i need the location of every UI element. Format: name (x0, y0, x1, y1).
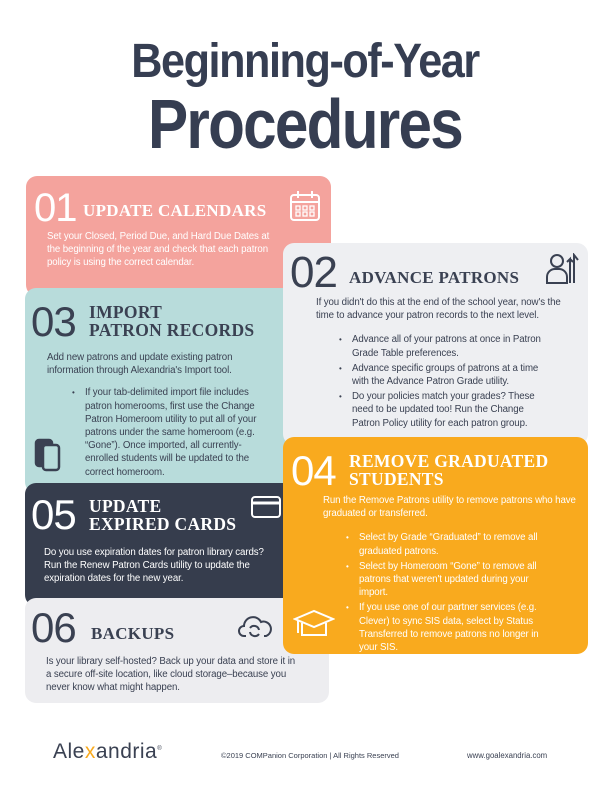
number 02: 02 (290, 248, 337, 297)
heading 04: REMOVE GRADUATED (349, 451, 548, 471)
heading 02: ADVANCE PATRONS (349, 268, 519, 287)
title: Procedures (148, 85, 462, 163)
text 04: Run the Remove Patrons utility to remove patrons who have graduated or transferred. (323, 495, 576, 519)
icon: cloud sync (238, 616, 272, 638)
heading 05: EXPIRED CARDS (89, 514, 236, 534)
number 04: 04 (291, 447, 336, 494)
text 02: If you didn't do this at the end of the school year, now's the time to advance your patron records to the next level. (316, 297, 561, 321)
text 05: Do you use expiration dates for patron library cards? Run the Renew Patron Cards utility to update the expiration dates for the new year. (44, 547, 264, 584)
panel: 03 import patron records (25, 288, 325, 493)
text 06: Is your library self-hosted? Back up your data and store it in a secure off-site location, like cloud storage–because you never know what might happen. (46, 656, 295, 693)
heading 01: UPDATE CALENDARS (83, 201, 266, 220)
text 02: Advance specific groups of patrons at a time with the Advance Patron Grade utility. (352, 363, 538, 387)
text 01: Set your Closed, Period Due, and Hard Due Dates at the beginning of the year and check that each patron policy is using the correct calendar. (47, 231, 269, 268)
heading 06: BACKUPS (91, 624, 174, 643)
icon: card (251, 496, 281, 518)
heading 05: UPDATE (89, 496, 161, 516)
text 04 (323, 495, 576, 653)
number 03: 03 (31, 298, 76, 345)
footer: logo: Alexandria® (53, 740, 162, 763)
text 03: Add new patrons and update existing patron information through Alexandria's Import tool. (47, 352, 232, 376)
heading 03: PATRON RECORDS (89, 320, 254, 340)
panel: 06 backups (25, 598, 329, 703)
footer: url: www.goalexandria.com (467, 751, 547, 760)
heading 05 (89, 496, 236, 534)
text 02: Do your policies match your grades? These need to be updated too! Run the Change Patron Policy utility for each patron group. (352, 391, 535, 429)
text 02 (316, 297, 561, 429)
number 01: 01 (34, 186, 76, 230)
heading 03 (89, 302, 254, 340)
number 06: 06 (31, 604, 76, 651)
panel: 01 update calendars (26, 176, 331, 296)
panel: 05 update expired cards (25, 483, 311, 606)
text 04: Select by Homeroom “Gone” to remove all patrons that weren't updated during your import. (359, 561, 537, 598)
text 03 (47, 352, 256, 478)
heading 04: STUDENTS (349, 469, 444, 489)
title: Beginning-of-Year (131, 35, 479, 88)
title (131, 35, 480, 163)
text 04: Select by Grade “Graduated” to remove all graduated patrons. (359, 532, 537, 557)
text 03: If your tab-delimited import file includes patron homerooms, first use the Change Patron Homeroom utility to put all of your patrons under the same homeroom (e.g. “Gone”). Once imported, all currently-enrolled students will be updated to the correct homeroom. (85, 387, 256, 478)
icon: person with arrow (546, 253, 579, 284)
heading 04 (349, 451, 548, 489)
heading 03: IMPORT (89, 302, 162, 322)
number 05: 05 (31, 491, 76, 538)
footer: copyright: ©2019 COMPanion Corporation | All Rights Reserved (221, 751, 399, 760)
text 04: If you use one of our partner services (e.g. Clever) to sync SIS data, select by Status Transferred to remove patrons no longer in your SIS. (359, 602, 539, 653)
icon: calendar (290, 191, 320, 221)
panel: 02 advance patrons (283, 243, 588, 445)
icon: copies (34, 438, 60, 472)
icon: graduation cap (293, 610, 335, 636)
text 02: Advance all of your patrons at once in Patron Grade Table preferences. (352, 334, 541, 359)
panel: 04 remove graduated students (283, 437, 588, 654)
